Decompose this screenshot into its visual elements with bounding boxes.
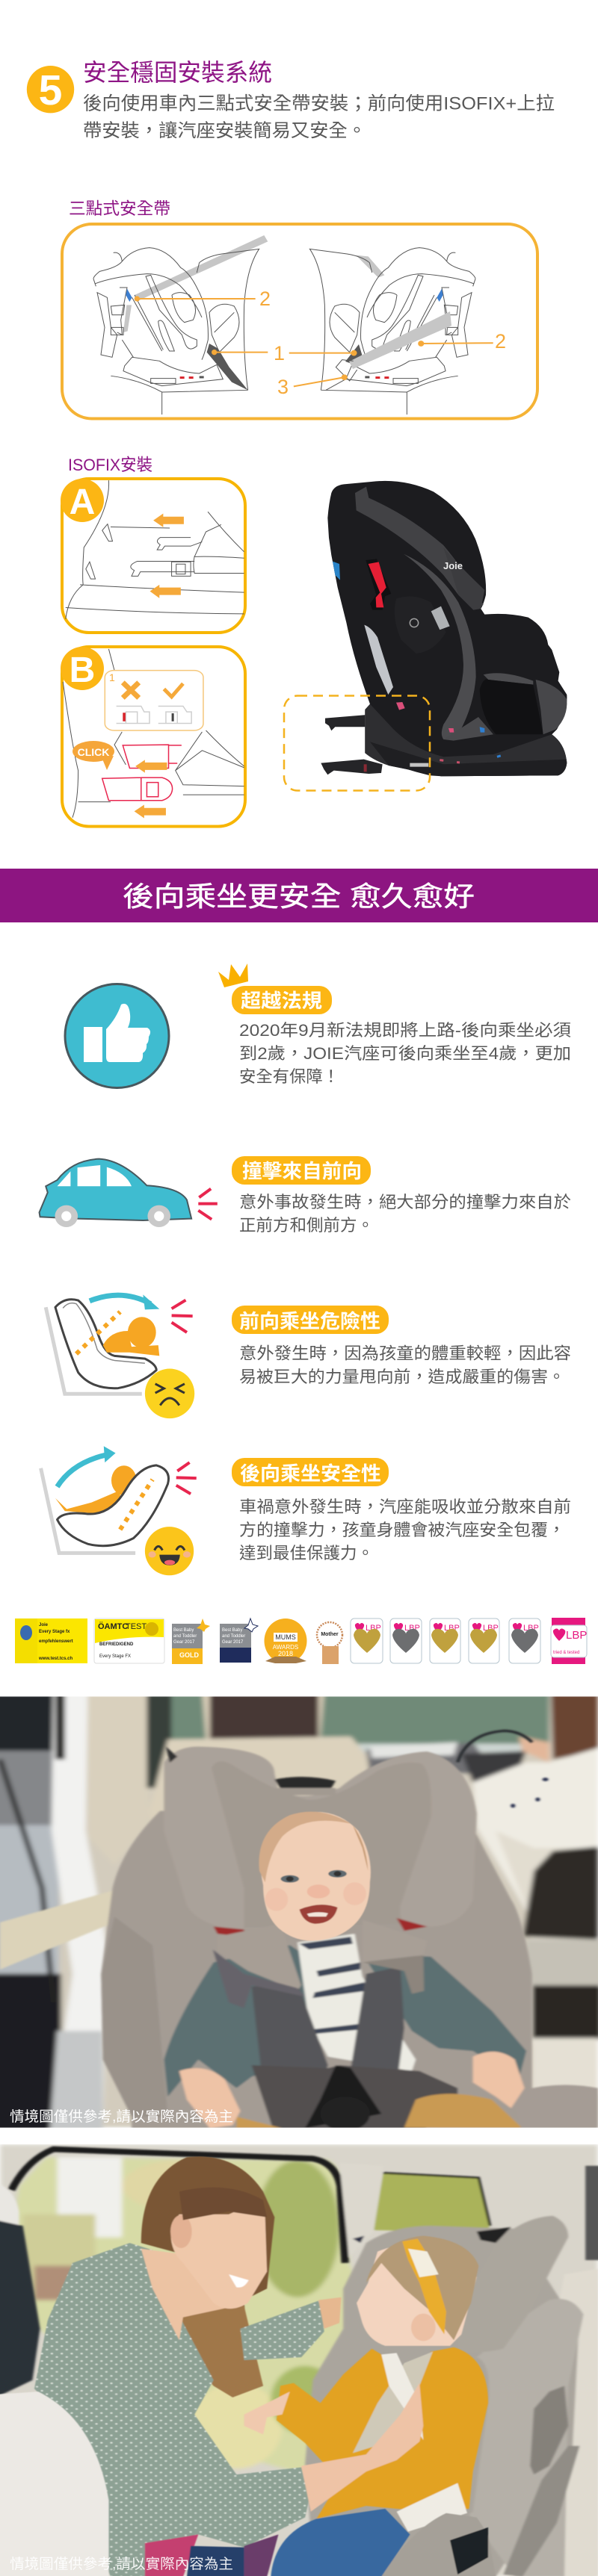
block: forward facing danger bbox=[46, 1294, 571, 1418]
subheading: three point belt: 三點式安全帶 bbox=[69, 199, 170, 218]
icon: car bbox=[40, 1159, 218, 1227]
award: best baby gold: GOLD bbox=[179, 1651, 199, 1659]
section heading: installation system bbox=[27, 59, 555, 141]
description: 方的撞擊力，孩童身體會被汽座安全包覆， bbox=[239, 1521, 565, 1539]
description: 正前方和側前方。 bbox=[239, 1216, 374, 1235]
pill label: 撞擊來自前向 bbox=[242, 1160, 362, 1182]
callout numbers: 2 bbox=[495, 330, 506, 353]
description: 易被巨大的力量甩向前，造成嚴重的傷害。 bbox=[239, 1368, 565, 1386]
headrest fabric bbox=[355, 487, 484, 610]
award: yellow test label bbox=[15, 1618, 87, 1663]
award: best baby gold bbox=[172, 1618, 210, 1664]
banner bbox=[0, 869, 598, 922]
diagram: right seat bbox=[309, 248, 475, 415]
silver latch bbox=[431, 606, 450, 630]
icon: rear-facing seat bbox=[41, 1446, 197, 1553]
markers bbox=[396, 702, 405, 710]
silver strip bbox=[364, 625, 393, 695]
description: 2020年9月新法規即將上路-後向乘坐必須 bbox=[239, 1021, 571, 1040]
red tension indicator bbox=[366, 559, 391, 610]
icon: number 5 badge: 5 bbox=[39, 66, 62, 114]
panel A: ISOFIX connectors bbox=[61, 479, 245, 633]
silhouette bbox=[327, 481, 567, 776]
award: made for mums: MUMS bbox=[275, 1633, 296, 1641]
award: LBP winner 2: LBP bbox=[404, 1624, 420, 1633]
product photo: car seat with ISOFIX bbox=[321, 481, 567, 776]
callout numbers: 3 bbox=[277, 376, 289, 398]
icon: forward-facing seat bbox=[46, 1294, 193, 1394]
diagram: left seat bbox=[93, 235, 268, 415]
block: impact from front bbox=[40, 1156, 571, 1235]
award: best baby consumer choice: Gear 2017 bbox=[222, 1640, 244, 1645]
photo: baby in car seat bbox=[0, 1694, 598, 2134]
pill label: 超越法規 bbox=[241, 990, 322, 1012]
blue tag bbox=[333, 562, 340, 580]
badge B bbox=[61, 647, 104, 690]
intro text: 帶安裝，讓汽座安裝簡易又安全。 bbox=[83, 120, 366, 141]
label "1": 1 bbox=[109, 671, 115, 683]
award: LBP winner 3 bbox=[430, 1618, 460, 1663]
pill label bbox=[232, 986, 332, 1014]
panel B: ISOFIX click bbox=[61, 647, 245, 826]
award: yellow test label: empfehlenswert bbox=[39, 1639, 73, 1644]
pill label: 後向乘坐安全性 bbox=[240, 1462, 381, 1485]
click bubble: CLICK bbox=[78, 746, 109, 758]
description: 到2歲，JOIE汽座可後向乘坐至4歲，更加 bbox=[239, 1044, 571, 1063]
award: LBP winner 5 bbox=[509, 1618, 540, 1663]
callout numbers: 2 bbox=[259, 288, 271, 310]
award: LBP winner 4 bbox=[469, 1618, 499, 1663]
award: yellow test label: www.test.tcs.ch bbox=[38, 1657, 73, 1661]
callout: dashed highlight bbox=[284, 696, 430, 790]
award: best baby consumer choice: Best Baby bbox=[222, 1628, 242, 1633]
award: OAMTC bbox=[94, 1618, 164, 1663]
award: LBP winner 5: LBP bbox=[523, 1624, 539, 1633]
callout numbers: 1 bbox=[274, 342, 285, 364]
award: OAMTC: BEFRIEDIGEND bbox=[99, 1642, 134, 1647]
icon: crown bbox=[218, 963, 248, 987]
award: made for mums bbox=[265, 1618, 306, 1663]
award: LBP winner 2 bbox=[390, 1618, 422, 1663]
photo: mother and girl in car bbox=[0, 2144, 598, 2576]
awards row bbox=[15, 1618, 587, 1664]
description: 意外事故發生時，絕大部分的撞擊力來自於 bbox=[239, 1193, 571, 1211]
icon: number 5 badge bbox=[27, 66, 74, 114]
badge B: B bbox=[70, 651, 95, 690]
banner: 後向乘坐更安全 愈久愈好 bbox=[123, 881, 475, 912]
caption: 情境圖僅供參考,請以實際內容為主 bbox=[10, 2556, 233, 2572]
icon: thumbs up bbox=[65, 984, 169, 1087]
award: OAMTC: TEST bbox=[126, 1622, 147, 1631]
award: best baby gold: and Toddler bbox=[173, 1634, 197, 1639]
pill label bbox=[232, 1458, 389, 1486]
icon: happy face bbox=[145, 1527, 194, 1575]
icon: sad face bbox=[145, 1369, 194, 1418]
award: LBP recommended: tried & tested bbox=[553, 1651, 579, 1655]
award: yellow test label: Every Stage fx bbox=[39, 1630, 70, 1634]
award: LBP winner 1: LBP bbox=[366, 1624, 381, 1633]
award: LBP recommended bbox=[551, 1618, 587, 1664]
award: made for mums: 2018 bbox=[278, 1650, 293, 1657]
award: OAMTC: Every Stage FX bbox=[99, 1654, 131, 1659]
description: 意外發生時，因為孩童的體重較輕，因此容 bbox=[239, 1344, 571, 1362]
description: 達到最佳保護力。 bbox=[239, 1544, 374, 1562]
award: best baby consumer choice bbox=[220, 1618, 258, 1663]
description: 車禍意外發生時，汽座能吸收並分散來自前 bbox=[239, 1498, 571, 1516]
pill label: 前向乘坐危險性 bbox=[239, 1310, 380, 1332]
award: LBP winner 3: LBP bbox=[444, 1624, 460, 1633]
caption: 情境圖僅供參考,請以實際內容為主 bbox=[10, 2108, 233, 2125]
ISOFIX arms bbox=[321, 715, 383, 775]
award: LBP recommended: LBP bbox=[566, 1629, 587, 1642]
leader lines bbox=[289, 341, 493, 386]
badge A: A bbox=[70, 482, 95, 522]
description: 安全有保障！ bbox=[239, 1067, 339, 1086]
subheading: ISOFIX: ISOFIX安裝 bbox=[68, 456, 152, 474]
block: rear facing safety bbox=[41, 1446, 571, 1575]
award: best baby consumer choice: and Toddler bbox=[222, 1634, 245, 1639]
brand: Joie bbox=[443, 560, 463, 571]
award: yellow test label: Joie bbox=[39, 1623, 49, 1627]
side bolster and cup bbox=[536, 680, 567, 734]
base bbox=[365, 704, 567, 776]
title: 安全穩固安裝系統 bbox=[83, 59, 272, 86]
award: made for mums: AWARDS bbox=[273, 1644, 298, 1651]
badge A bbox=[61, 479, 104, 522]
callout numbers bbox=[259, 288, 506, 398]
pill label bbox=[232, 1156, 371, 1185]
recline disc bbox=[395, 596, 446, 654]
pill label bbox=[232, 1306, 389, 1334]
award: mother and baby: Mother bbox=[321, 1632, 339, 1637]
award: OAMTC: ÖAMTC bbox=[98, 1621, 128, 1631]
award: LBP winner 4: LBP bbox=[483, 1624, 499, 1633]
award: best baby gold: Gear 2017 bbox=[173, 1640, 195, 1645]
click bubble bbox=[73, 741, 114, 770]
intro text: 後向使用車內三點式安全帶安裝；前向使用ISOFIX+上拉 bbox=[83, 93, 555, 114]
panel: three point belt diagram bbox=[62, 224, 537, 418]
shoulder band bbox=[404, 554, 476, 739]
award: LBP winner 1 bbox=[351, 1618, 383, 1663]
award: best baby gold: Best Baby bbox=[173, 1628, 194, 1633]
award: mother and baby bbox=[317, 1622, 342, 1664]
block: beyond regulation bbox=[65, 963, 571, 1087]
